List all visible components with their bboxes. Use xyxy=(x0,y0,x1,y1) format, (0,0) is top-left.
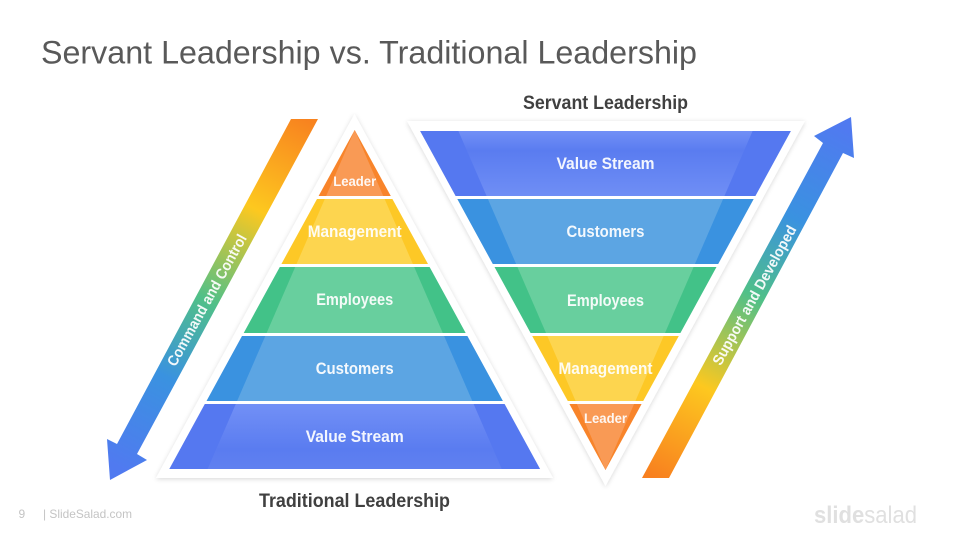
layer: management: Management xyxy=(558,360,653,378)
layer: value stream xyxy=(420,131,791,196)
arrow: command and control xyxy=(107,119,318,480)
layer: employees xyxy=(494,267,716,333)
pyramid backing xyxy=(156,114,553,478)
layer: employees: Employees xyxy=(316,291,393,309)
arrow label: command and control: Command and Control xyxy=(164,232,251,369)
layer: customers: Customers xyxy=(316,360,394,378)
logo: slidesalad: slidesalad xyxy=(814,502,917,529)
footer: page number: 9 xyxy=(18,507,26,521)
layer: management: Management xyxy=(308,223,402,241)
title: Servant Leadership vs. Traditional Leadership xyxy=(41,34,697,70)
footer: site name: | SlideSalad.com xyxy=(43,507,132,521)
layer: management xyxy=(532,336,679,401)
panel: traditional leadership pyramid xyxy=(156,114,553,478)
layer: value stream: Value Stream xyxy=(306,428,404,446)
arrow label: support and developed: Support and Developed xyxy=(709,223,800,368)
layer: value stream xyxy=(169,404,540,469)
layer: employees xyxy=(244,267,466,333)
layer: customers xyxy=(457,199,754,264)
heading: servant leadership: Servant Leadership xyxy=(523,93,688,114)
layer: leader: Leader xyxy=(584,411,628,426)
layer: customers xyxy=(206,336,503,401)
layer: leader: Leader xyxy=(333,174,377,189)
layer: management xyxy=(281,199,428,264)
layer: employees: Employees xyxy=(567,292,644,310)
layer: value stream: Value Stream xyxy=(556,155,654,173)
panel: servant leadership inverted pyramid xyxy=(407,121,805,486)
arrow: support and developed xyxy=(642,117,854,478)
inverted pyramid backing xyxy=(407,121,805,486)
layer: leader xyxy=(569,404,642,470)
heading: traditional leadership: Traditional Leadership xyxy=(259,491,450,512)
layer: leader xyxy=(319,130,391,196)
layer: customers: Customers xyxy=(566,223,644,241)
